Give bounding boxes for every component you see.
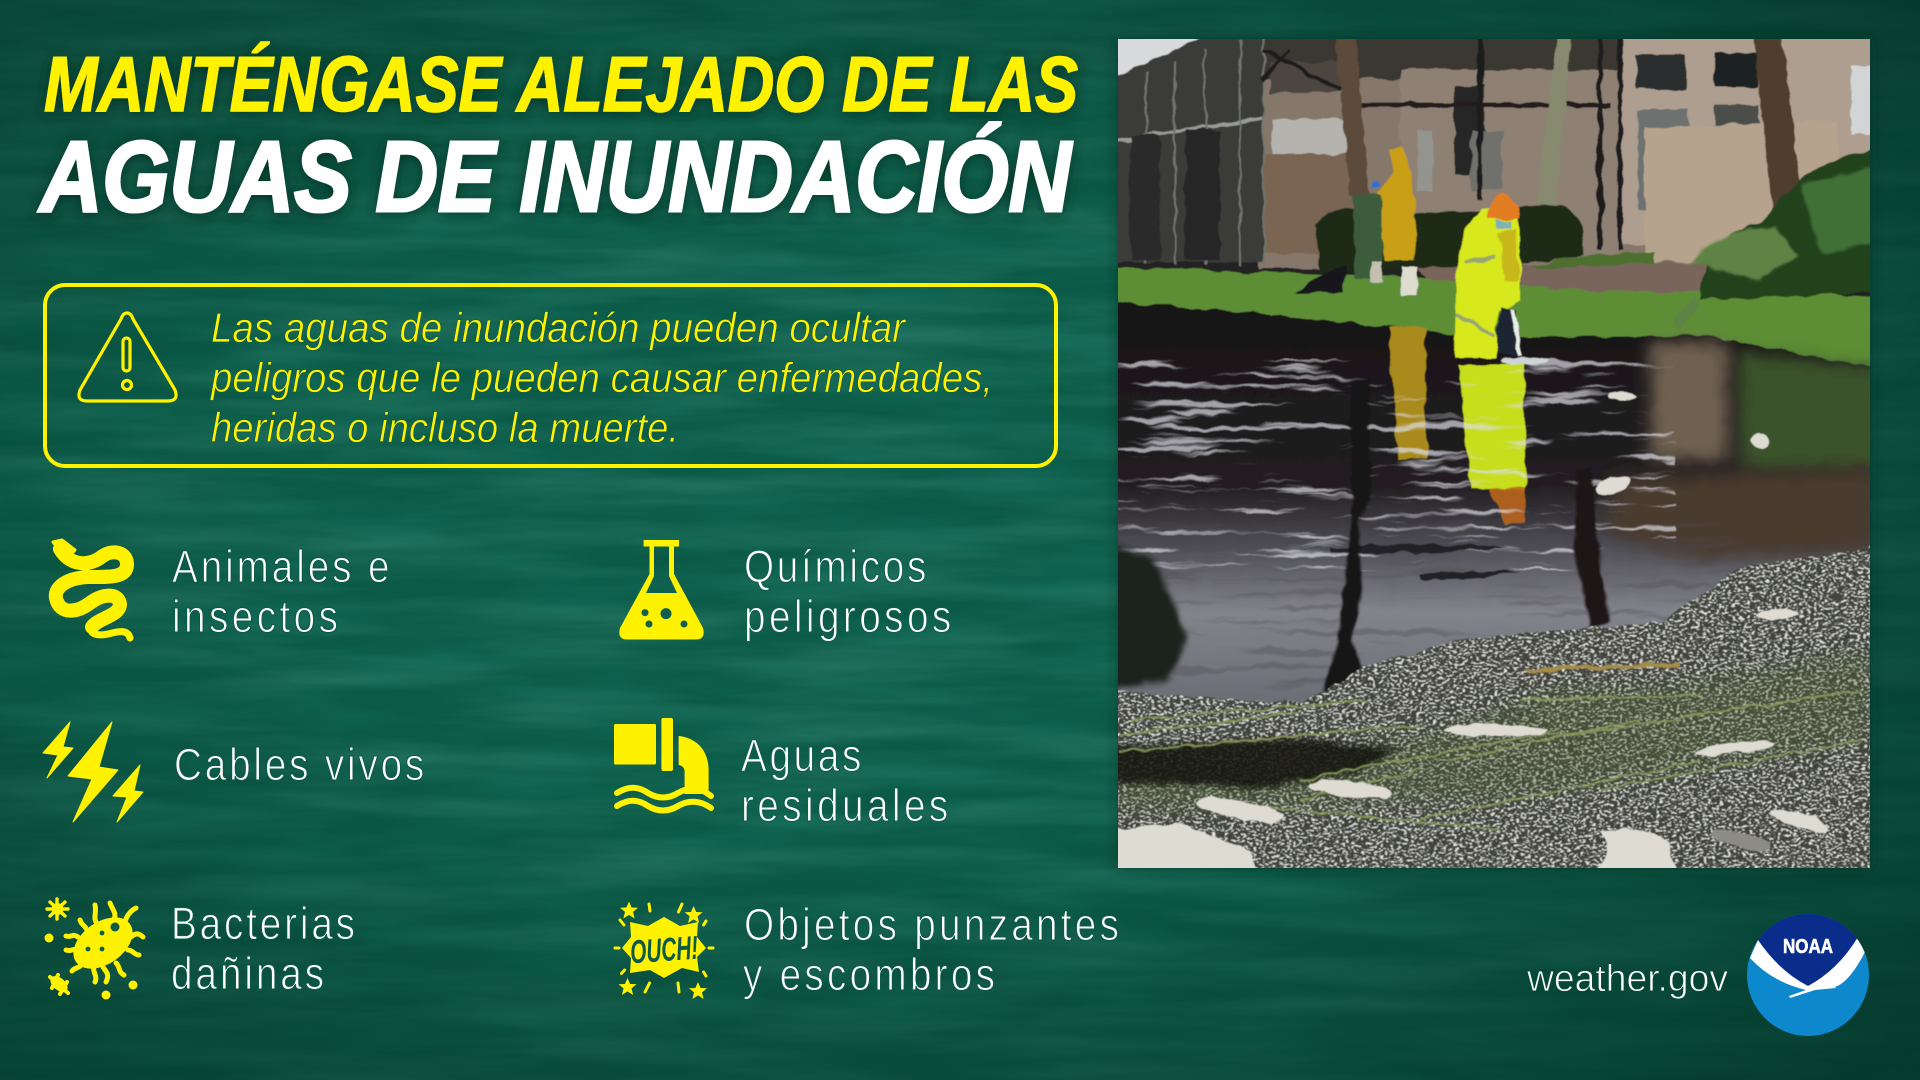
screen enclosure [1105, 30, 1340, 265]
label: Bacterias [171, 898, 355, 949]
icon: bacteria [44, 899, 143, 1000]
label: insectos [172, 591, 338, 642]
label [172, 541, 390, 642]
hazard: harmful bacteria [44, 898, 355, 1000]
title: MANTÉNGASE ALEJADO DE LAS [44, 40, 1078, 128]
icon: warning triangle [79, 313, 176, 401]
label: Objetos punzantes [744, 899, 1119, 950]
label: Cables vivos [174, 739, 424, 790]
hazard: animals and insects [53, 540, 390, 642]
tropical plants [1672, 146, 1885, 330]
hazard: sewage [614, 718, 948, 831]
icon: flask [619, 540, 704, 640]
label: Químicos [744, 541, 926, 592]
label: Animales e [172, 541, 390, 592]
label: residuales [741, 780, 948, 831]
logo wordmark: NOAA [1783, 936, 1833, 958]
callout: warning box [45, 285, 1056, 466]
hazard: dangerous chemicals [619, 540, 951, 642]
worker in neon raincoat [1455, 195, 1549, 365]
hedge [1314, 206, 1584, 272]
label: peligrosos [744, 591, 951, 642]
water reflections [1105, 328, 1885, 700]
lawn [1105, 267, 1885, 370]
callout text: peligros que le pueden causar enfermedades, [209, 354, 993, 401]
water [1105, 301, 1885, 710]
hazard: sharp objects and debris [615, 899, 1119, 1000]
title [37, 40, 1078, 233]
icon: ouch burst: OUCH! [629, 929, 699, 970]
label [741, 730, 948, 831]
photo: flooded yard with workers and dead fish [1105, 30, 1885, 880]
hazard: live wires [43, 722, 424, 822]
label: Aguas [741, 730, 861, 781]
callout text: Las aguas de inundación pueden ocultar [211, 304, 907, 351]
sky [1118, 39, 1200, 76]
title: AGUAS DE INUNDACIÓN [37, 121, 1073, 233]
icon: sewage pipe [614, 718, 711, 810]
icon: lightning bolts [43, 722, 143, 822]
worker in dark yellow raincoat [1294, 146, 1417, 295]
label: dañinas [171, 948, 324, 999]
label [744, 541, 951, 642]
icon: snake [53, 540, 130, 638]
debris and dead fish field [1105, 540, 1885, 880]
label [171, 898, 355, 999]
fish [1105, 392, 1831, 880]
website label: weather.gov [1526, 958, 1728, 1000]
icon: ouch burst [615, 902, 713, 999]
label: y escombros [743, 949, 995, 1000]
callout text: heridas o incluso la muerte. [211, 404, 679, 451]
NOAA logo [1747, 914, 1869, 1036]
house wall [1258, 30, 1883, 269]
palm trunks [1335, 30, 1804, 215]
label [743, 899, 1119, 1000]
privacy wall [1644, 120, 1837, 262]
callout text [209, 304, 993, 451]
